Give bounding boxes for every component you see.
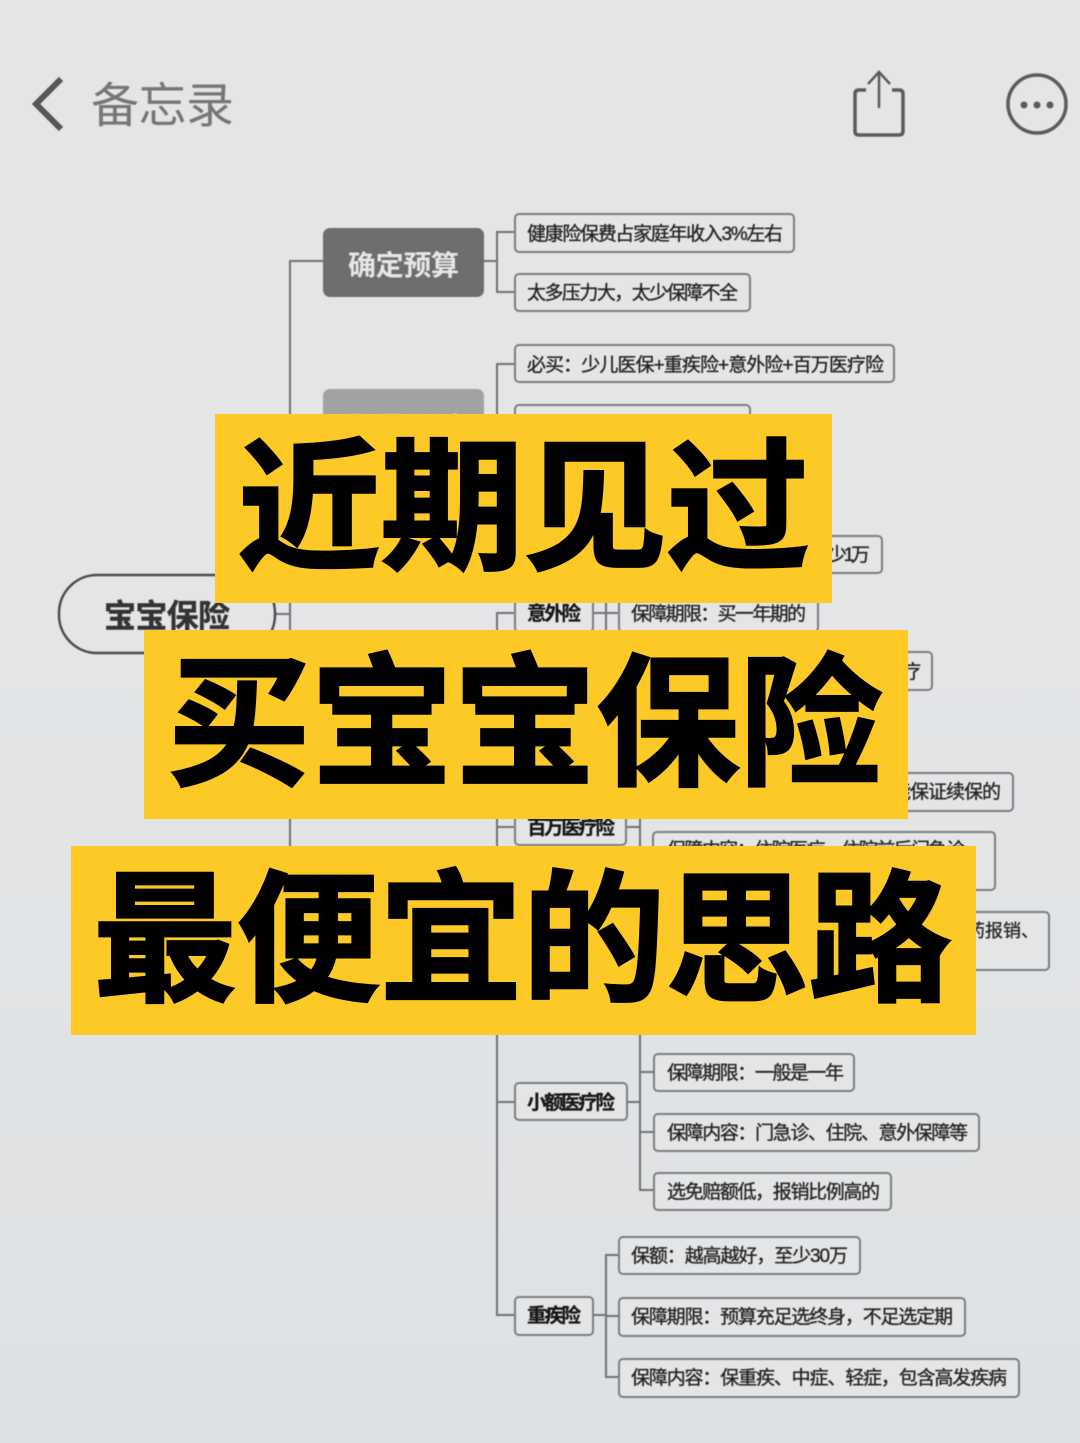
leaf: premium share: 健康险保费占家庭年收入3%左右	[527, 223, 783, 245]
leaf: partly hidden content: 疗	[902, 661, 921, 683]
header title: 备忘录	[91, 80, 234, 133]
leaf: renewal: 能保证续保的	[892, 781, 1001, 803]
icon: more menu	[1008, 75, 1066, 133]
headline banner line 3: 最便宜的思路	[94, 862, 952, 1021]
leaf: sum insured	[619, 1237, 860, 1274]
branch: accident insurance	[515, 594, 593, 632]
branch: coverage plan	[323, 389, 484, 458]
leaf: small medical term	[654, 1054, 854, 1091]
leaf: accident term	[619, 594, 818, 632]
leaf: critical term: 保障期限：预算充足选终身，不足选定期	[631, 1306, 953, 1328]
leaf: accident term: 保障期限：买一年期的	[631, 603, 806, 625]
leaf: medical content	[653, 832, 995, 890]
leaf: drug reimbursement	[700, 912, 1049, 970]
leaf: small medical content: 保障内容：门急诊、住院、意外保障等	[667, 1122, 968, 1144]
leaf: pressure: 太多压力大，太少保障不全	[527, 282, 738, 304]
leaf: critical term	[619, 1298, 965, 1336]
branch: small medical	[515, 1083, 627, 1120]
leaf: must buy: 必买：少儿医保+重疾险+意外险+百万医疗险	[527, 354, 884, 376]
branch: critical illness: 重疾险	[527, 1304, 581, 1327]
leaf: small medical content	[654, 1114, 979, 1151]
leaf: sum insured: 保额：越高越好，至少30万	[631, 1245, 848, 1267]
branch: coverage plan: 配置原则	[348, 412, 459, 443]
leaf: renewal	[700, 773, 1013, 811]
leaf: deductible: 选免赔额低，报销比例高的	[667, 1181, 880, 1203]
icon: share	[855, 72, 903, 135]
leaf: partly hidden amount	[700, 536, 882, 573]
leaf: deductible	[654, 1173, 891, 1210]
branch: critical illness	[515, 1297, 593, 1335]
branch: small medical: 小额医疗险	[527, 1091, 615, 1114]
leaf: hidden option	[515, 405, 750, 443]
leaf: partly hidden amount: 至少1万	[812, 544, 870, 566]
icon: back chevron	[36, 79, 61, 129]
branch: million medical	[515, 808, 626, 845]
leaf: medical content: 保障内容：住院医疗、住院前后门急诊	[667, 839, 965, 861]
connector lines	[275, 232, 653, 1377]
leaf: must buy	[515, 345, 894, 382]
branch: budget: 确定预算	[348, 250, 459, 281]
root node	[59, 575, 275, 653]
leaf: small medical term: 保障期限：一般是一年	[667, 1062, 844, 1084]
leaf: drug reimbursement: 药报销、	[967, 921, 1039, 941]
headline banner line 1: 近期见过	[238, 430, 810, 589]
branch: accident insurance: 意外险	[527, 602, 581, 625]
branch: million medical: 百万医疗险	[527, 816, 615, 839]
headline banner line 2: 买宝宝保险	[168, 646, 882, 805]
root node: 宝宝保险	[104, 598, 230, 634]
leaf: pressure	[515, 274, 750, 311]
branch: budget	[323, 228, 484, 297]
leaf: partly hidden content	[700, 652, 932, 690]
leaf: critical content: 保障内容：保重疾、中症、轻症，包含高发疾病	[631, 1367, 1007, 1389]
leaf: premium share	[515, 214, 794, 252]
leaf: critical content	[619, 1359, 1019, 1397]
